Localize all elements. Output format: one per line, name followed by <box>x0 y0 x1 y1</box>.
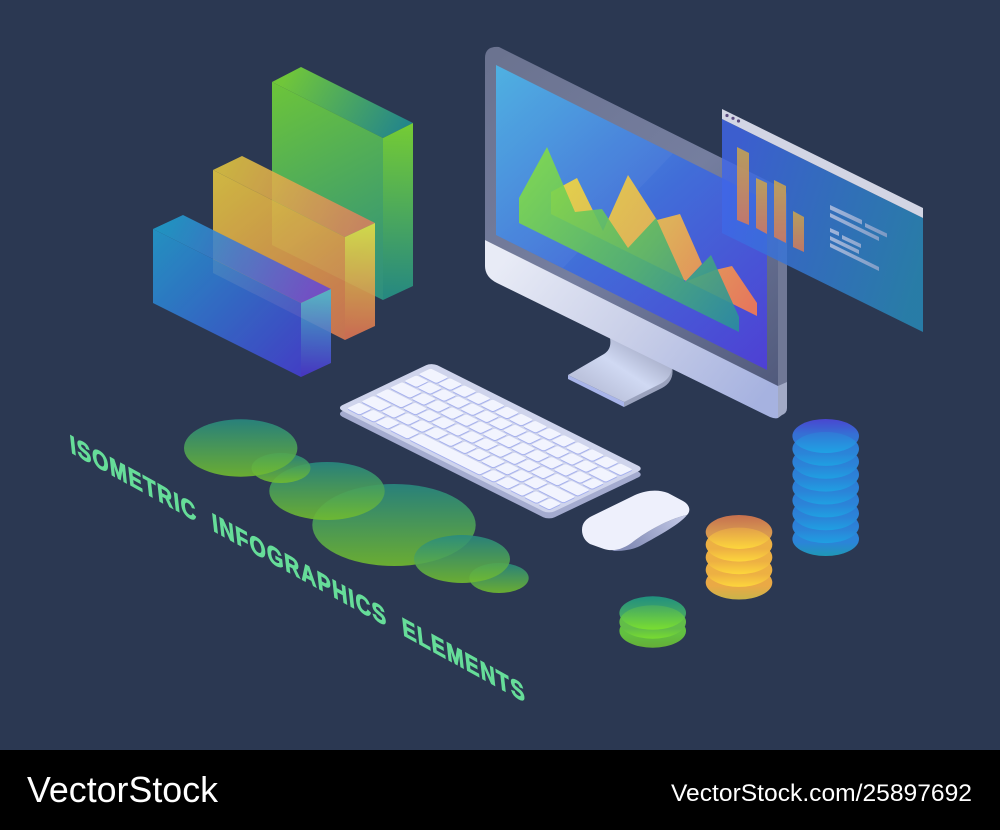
screen reflection <box>496 65 673 268</box>
orange coin stack <box>706 515 772 600</box>
monitor chin side <box>778 382 787 418</box>
bubble chart <box>184 419 529 593</box>
screen <box>496 65 767 370</box>
watermark footer <box>0 750 1000 830</box>
monitor bezel <box>485 47 787 387</box>
panel title bar <box>722 109 923 218</box>
keys <box>348 369 632 509</box>
footer logo text: VectorStock <box>27 769 219 810</box>
monitor stand <box>568 338 673 407</box>
footer image id: VectorStock.com/25897692 <box>671 780 972 807</box>
floating browser panel <box>722 109 923 332</box>
keyboard <box>337 362 644 520</box>
isometric 3D bar chart <box>153 67 413 377</box>
keyboard top <box>337 362 644 514</box>
yellow bar <box>213 156 375 340</box>
mouse <box>582 491 689 551</box>
mouse top <box>582 491 689 550</box>
panel bar chart <box>737 147 804 252</box>
green coin stack <box>619 596 686 648</box>
blue bar <box>153 215 331 377</box>
area chart on screen <box>519 147 757 332</box>
key shadows <box>348 370 632 510</box>
blue coin stack <box>792 419 859 556</box>
keyboard base <box>337 368 644 520</box>
mouse side <box>612 515 687 551</box>
monitor right edge <box>778 186 787 387</box>
monitor chin <box>485 240 778 418</box>
panel text lines <box>830 205 887 271</box>
green area series <box>519 147 739 332</box>
yellow area series <box>551 175 757 316</box>
desktop monitor <box>485 47 787 418</box>
window dots <box>725 114 740 123</box>
panel body <box>722 119 923 332</box>
title: isometric infographics elements: ISOMETRIC INFOGRAPHICS ELEMENTS <box>68 430 526 709</box>
green bar <box>272 67 413 300</box>
